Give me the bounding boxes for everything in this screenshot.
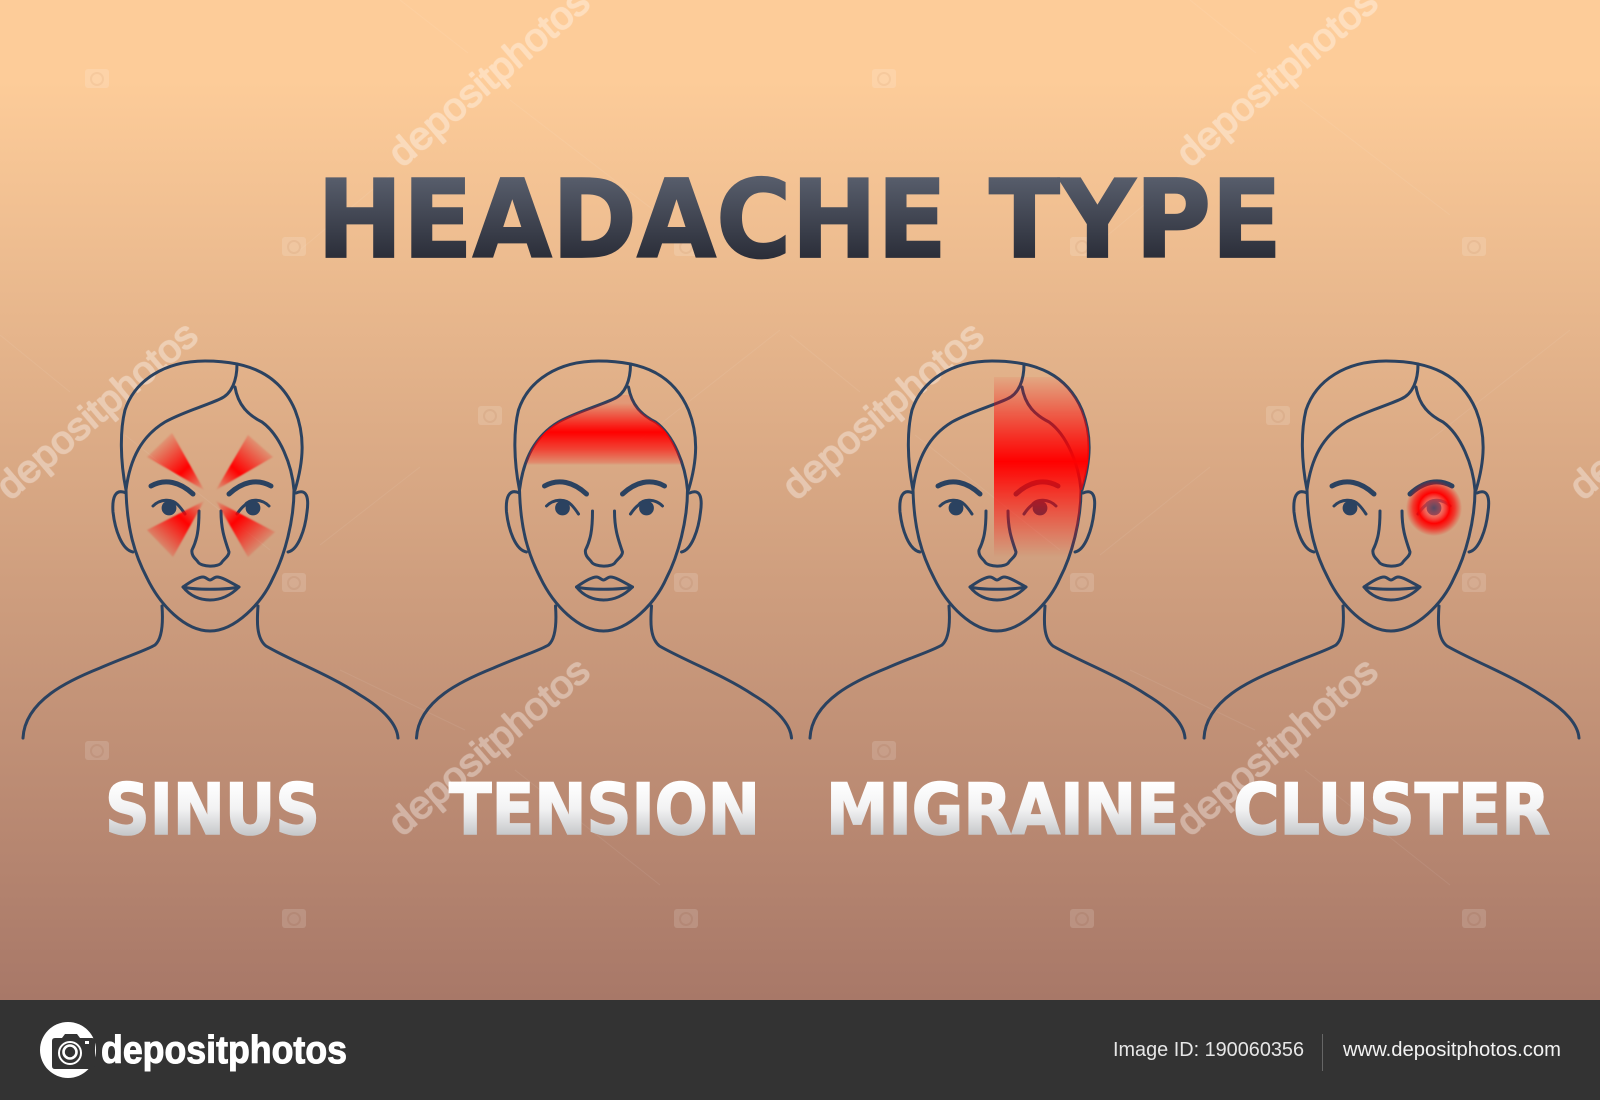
- title: HEADACHE: [317, 158, 947, 283]
- label: sinus: SINUS: [105, 769, 320, 851]
- label: tension: TENSION: [449, 769, 760, 851]
- footer bar: [0, 1000, 1600, 1100]
- watermark: depositphotos text: depositphotos: [775, 314, 992, 508]
- watermark: depositphotos text: [0, 0, 1600, 844]
- panel: tension headache figure: [416, 361, 792, 738]
- watermark: small camera icons: [85, 69, 1486, 928]
- pain area: sinus wedges: [147, 433, 275, 557]
- image id: Image ID: 190060356: [1113, 1039, 1304, 1061]
- pain area: forehead band: [526, 395, 682, 464]
- watermark: depositphotos text: depositphotos: [381, 650, 598, 844]
- website url: www.depositphotos.com: [1342, 1039, 1561, 1061]
- pain area: half of the head: [994, 377, 1094, 557]
- panel: sinus headache figure: [23, 361, 398, 738]
- panel: migraine headache figure: [810, 361, 1185, 738]
- title: [317, 158, 1282, 283]
- label: cluster: CLUSTER: [1233, 769, 1550, 851]
- panel: cluster headache figure: [1204, 361, 1579, 738]
- title: TYPE: [989, 158, 1282, 283]
- watermark: depositphotos text: depositphotos: [1169, 650, 1386, 844]
- pain area: around the eye: [1406, 480, 1462, 536]
- icon: camera logo: [40, 1022, 96, 1078]
- label: migraine: MIGRAINE: [826, 769, 1179, 851]
- logo wordmark: depositphotos: [101, 1029, 347, 1072]
